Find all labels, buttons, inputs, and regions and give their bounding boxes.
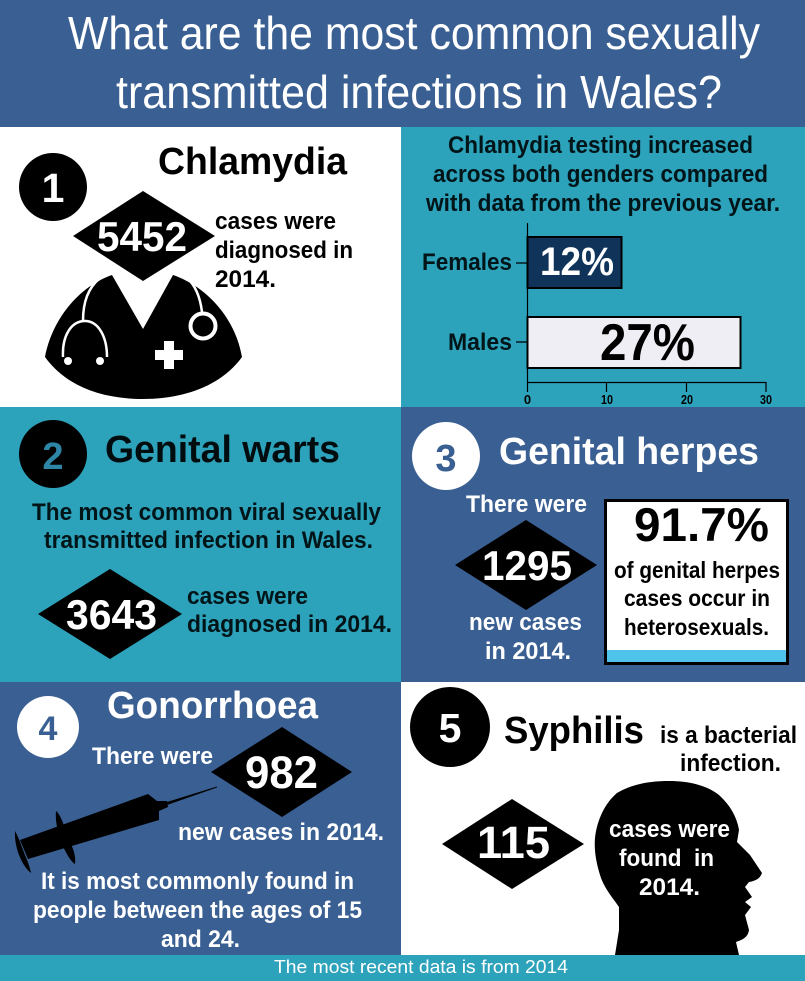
category labels: Males — [448, 329, 512, 356]
text: testing increase: with data from the previous year. — [425, 190, 780, 217]
text: there were: There were — [92, 743, 213, 770]
stat diamond: 3643 — [38, 569, 182, 659]
panel: genital warts — [0, 407, 401, 682]
number badge 2: 2 — [42, 436, 64, 478]
stat diamond: 3643: 3643 — [66, 591, 157, 638]
text: bacterial infection: infection. — [680, 750, 781, 777]
text: cases diagnosed — [215, 208, 353, 293]
header band with title: What are the most common sexually — [68, 7, 760, 59]
icon: syringe — [15, 786, 217, 873]
number badge 1 — [19, 153, 87, 221]
stat diamond: 1295 — [455, 520, 597, 610]
heading: gonorrhoea: Gonorrhoea — [107, 685, 319, 727]
number badge 2 — [19, 420, 87, 488]
axis labels: 10 — [601, 392, 613, 407]
callout: 91.7%: cases occur in — [624, 585, 770, 611]
stat diamond: 1295: 1295 — [482, 542, 572, 589]
bar: males 27%: 27% — [600, 314, 695, 372]
text: cases found — [609, 816, 730, 901]
header band with title — [0, 0, 805, 127]
text: testing increase — [425, 132, 780, 217]
stat diamond: 115 — [442, 799, 584, 889]
text: new cases: new cases in 2014. — [178, 819, 384, 846]
text: cases diagnosed — [187, 583, 392, 638]
category labels: Females — [422, 249, 512, 276]
number badge 4: 4 — [39, 710, 58, 748]
callout: 91.7%: of genital herpes — [614, 557, 780, 583]
axis labels: 0 — [524, 392, 531, 407]
stat diamond: 982 — [211, 727, 352, 817]
axis labels — [524, 392, 772, 407]
panel: gonorrhoea — [0, 682, 401, 955]
number badge 3 — [412, 422, 480, 490]
category labels — [422, 249, 512, 356]
callout: 91.7%: 91.7% — [634, 498, 769, 551]
text: cases diagnosed: diagnosed in 2014. — [187, 611, 392, 638]
heading: syphilis: Syphilis — [504, 710, 644, 752]
text: most commonly found — [33, 868, 362, 953]
axis labels: 20 — [681, 392, 693, 407]
icon: doctor — [45, 275, 242, 399]
text: there were: There were — [466, 491, 587, 518]
axis labels: 30 — [760, 392, 772, 407]
icon: head silhouette — [595, 781, 762, 955]
text: most common viral: The most common viral sexually — [32, 499, 382, 526]
footer note — [0, 955, 805, 981]
header band with title: transmitted infections in Wales? — [116, 66, 722, 118]
bar chart — [422, 223, 772, 407]
text: most common viral: transmitted infection in Wales. — [44, 527, 373, 554]
panel: chlamydia testing — [401, 127, 805, 407]
text: cases found: cases were — [609, 816, 730, 843]
number badge 1: 1 — [42, 165, 64, 211]
bar: males 27% — [528, 314, 740, 372]
stat diamond: 5452 — [73, 191, 215, 281]
text: cases diagnosed: diagnosed in — [215, 237, 353, 264]
footer note: The most recent data is from 2014 — [274, 957, 568, 977]
panel: chlamydia — [0, 127, 401, 407]
text: most commonly found: It is most commonly found in — [41, 868, 354, 895]
text: bacterial infection: is a bacterial — [660, 722, 797, 749]
text: cases diagnosed: 2014. — [215, 266, 276, 293]
callout: 91.7%: heterosexuals. — [624, 614, 769, 640]
number badge 4 — [17, 696, 79, 758]
text: testing increase: across both genders compared — [433, 161, 768, 188]
callout: 91.7% — [606, 498, 788, 664]
text: most commonly found: people between the ages of 15 — [33, 897, 362, 924]
panel: syphilis — [401, 682, 805, 955]
number badge 3: 3 — [435, 438, 457, 480]
text: new cases — [469, 609, 582, 665]
heading: genital herpes: Genital herpes — [499, 431, 759, 473]
text: cases diagnosed: cases were — [187, 583, 308, 610]
text: cases found: found in — [619, 845, 714, 872]
text: cases found: 2014. — [639, 874, 700, 901]
number badge 5 — [410, 687, 490, 767]
stat diamond: 982: 982 — [245, 747, 318, 798]
panel: genital herpes — [401, 407, 805, 682]
text: cases diagnosed: cases were — [215, 208, 336, 235]
text: most common viral — [32, 499, 382, 554]
stat diamond: 115: 115 — [477, 817, 550, 868]
text: new cases: in 2014. — [485, 638, 571, 665]
text: bacterial infection — [660, 722, 797, 777]
heading: chlamydia: Chlamydia — [158, 141, 348, 183]
number badge 5: 5 — [439, 705, 461, 751]
text: new cases: new cases — [469, 609, 582, 636]
stat diamond: 5452: 5452 — [97, 213, 187, 260]
text: testing increase: Chlamydia testing increased — [448, 132, 753, 159]
bar: females 12%: 12% — [540, 240, 614, 284]
heading: genital warts: Genital warts — [105, 429, 340, 471]
text: most commonly found: and 24. — [161, 926, 240, 953]
